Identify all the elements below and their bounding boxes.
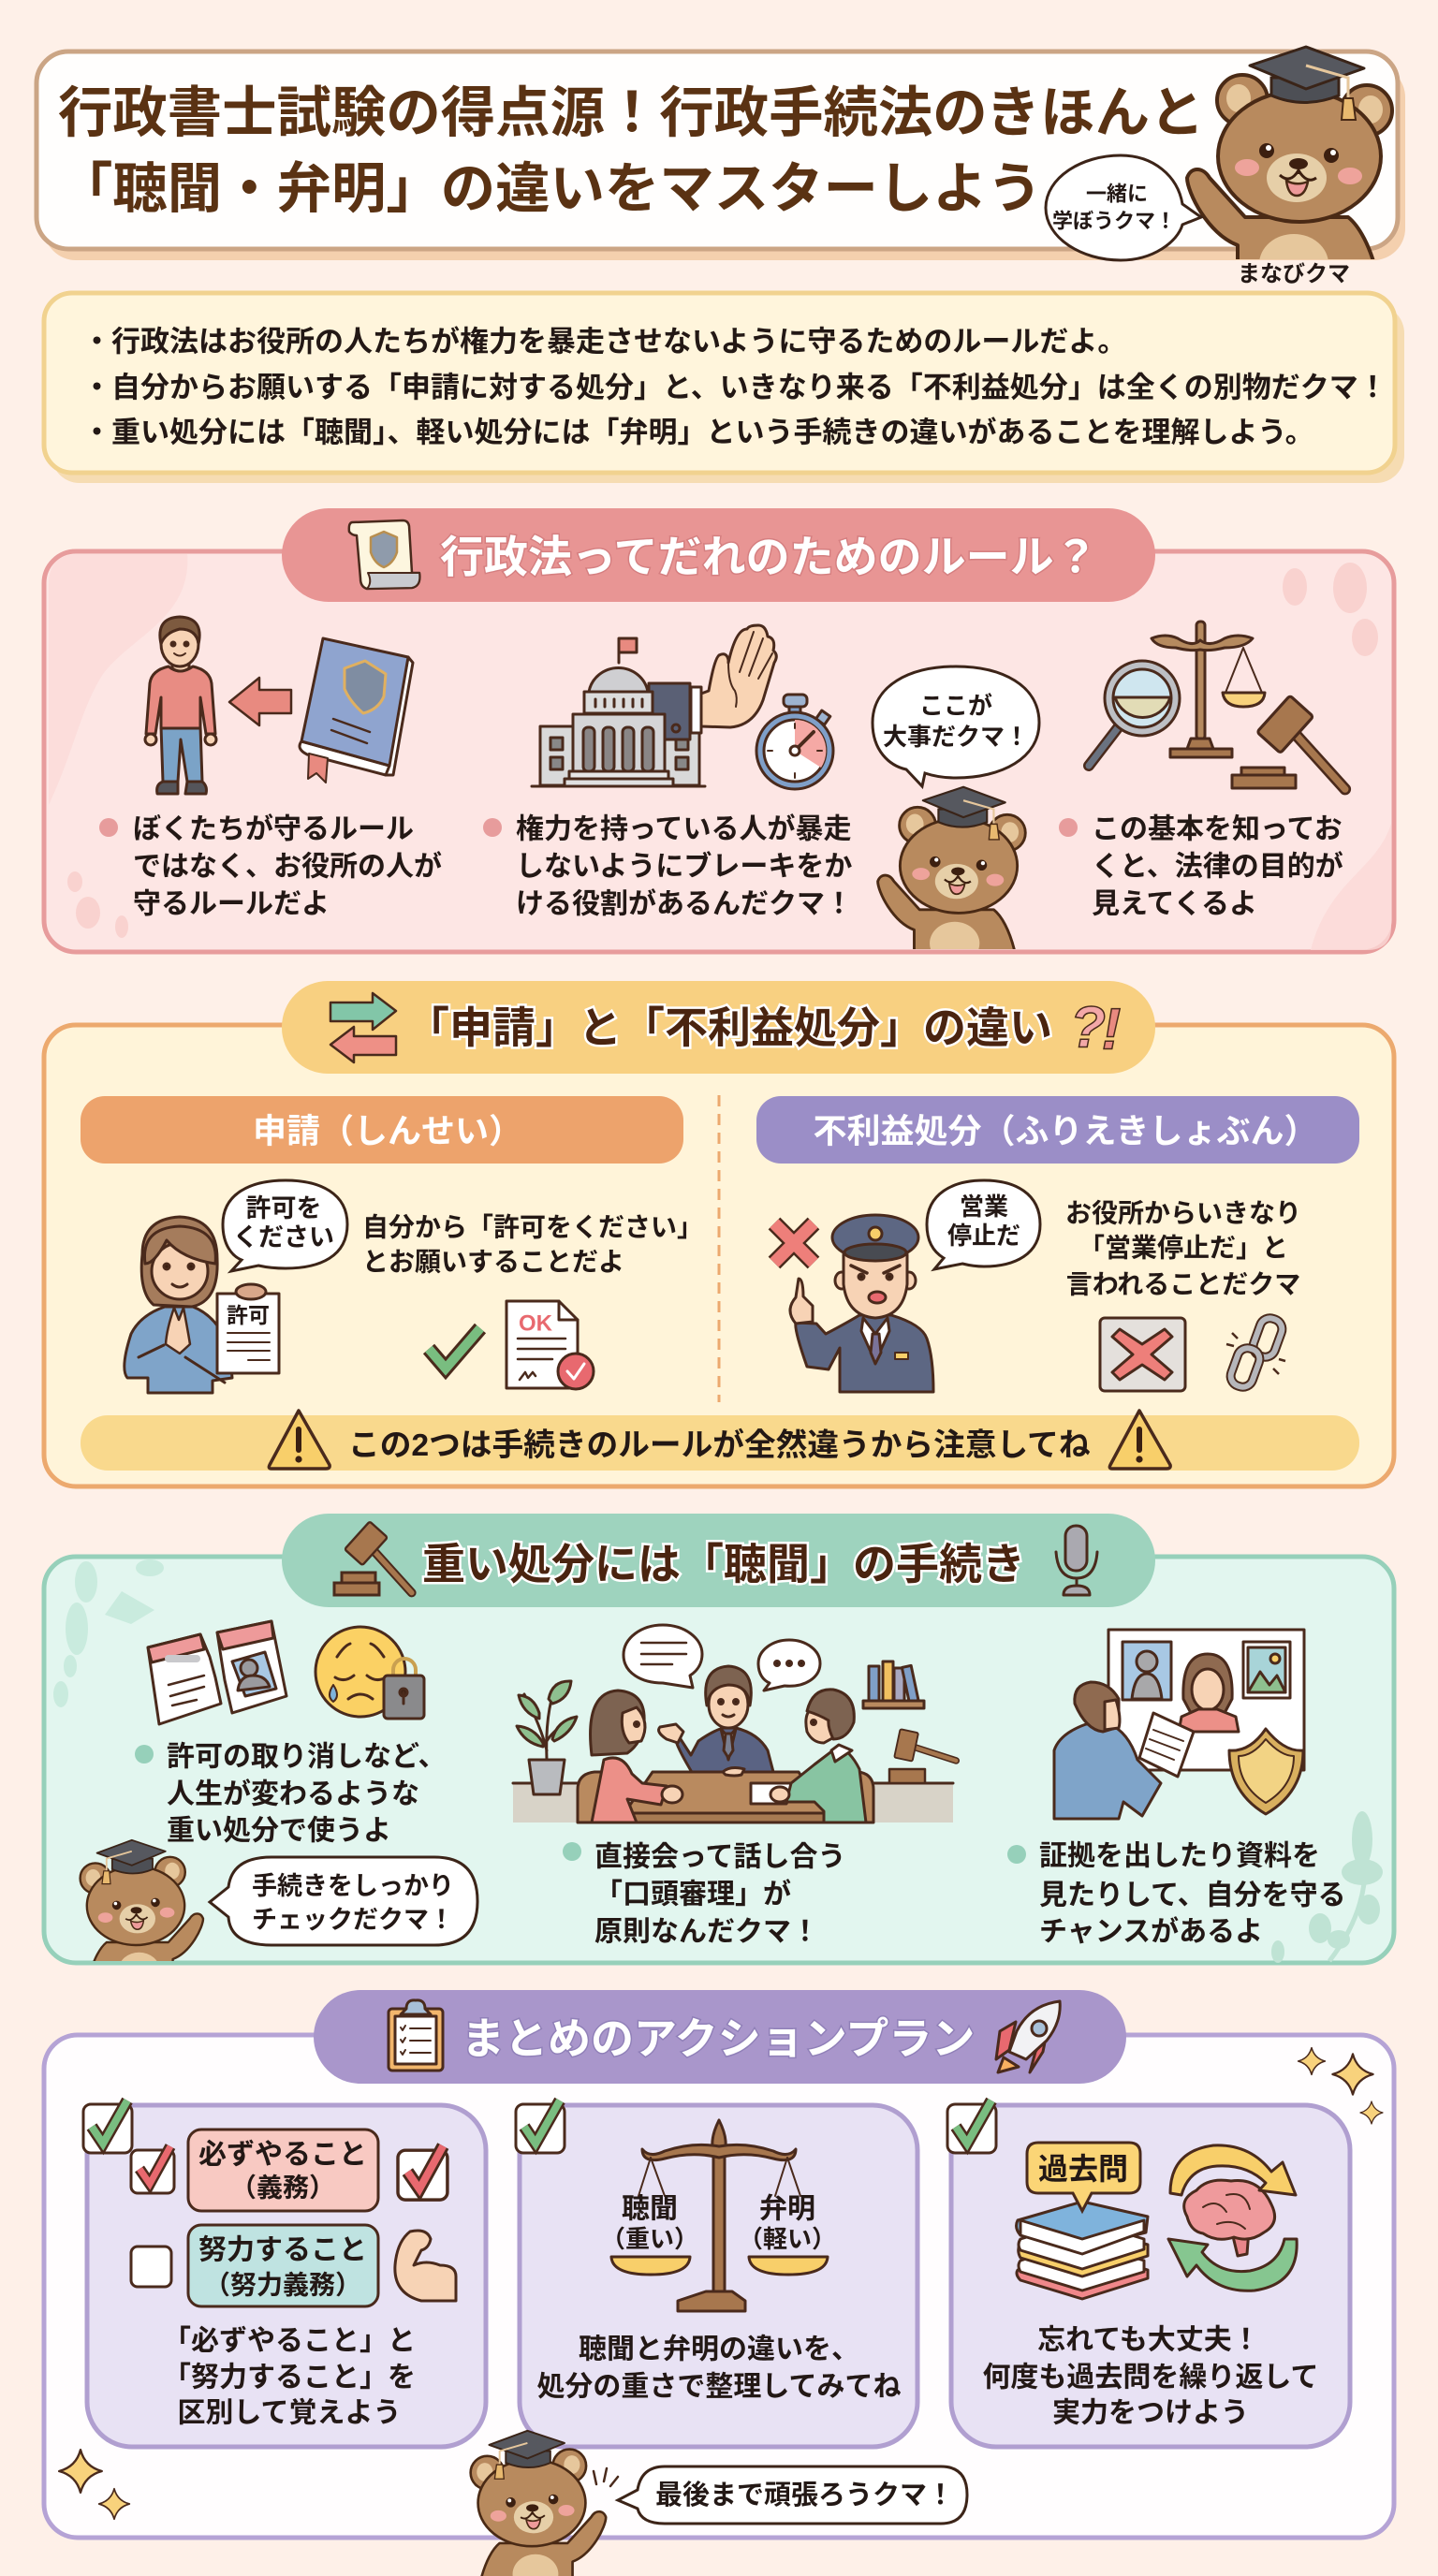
panel: summary points (44, 293, 1404, 483)
title text: 「聴聞・弁明」の違いをマスターしよう (58, 159, 1042, 219)
text: purpose of law: 見えてくるよ (1092, 889, 1257, 919)
text: oral hearing: 直接会って話し合う (594, 1842, 846, 1872)
card: duty vs effort (83, 2100, 486, 2447)
text: defend yourself: チャンスがあるよ (1039, 1915, 1263, 1947)
icon: rocket (996, 2001, 1060, 2072)
panel: action plan (44, 1990, 1394, 2576)
section heading: hearing (282, 1514, 1155, 1607)
icon: stopwatch (756, 695, 833, 789)
center man (676, 1728, 773, 1775)
text: adverse disposition explanation: 言われることだクマ (1066, 1269, 1300, 1299)
text: adverse disposition explanation (1065, 1198, 1301, 1299)
section heading: action plan (314, 1990, 1126, 2084)
warning bar: この2つは手続きのルールが全然違うから注意してね (348, 1427, 1091, 1463)
left header: application (81, 1096, 683, 1164)
text: heavy disposition (135, 1741, 446, 1846)
title text (58, 82, 1204, 219)
icon: government building with stop hand (532, 625, 776, 786)
label: past exams: 過去問 (1038, 2152, 1128, 2186)
text: defend yourself: 証拠を出したり資料を (1039, 1840, 1320, 1872)
text: oral hearing (563, 1842, 846, 1947)
speech bubble: important: ここが (919, 692, 992, 720)
label: explanation light: （軽い） (739, 2225, 836, 2253)
right header: adverse disposition: 不利益処分（ふりえきしょぶん） (814, 1112, 1317, 1149)
illustration: oral hearing meeting (513, 1625, 953, 1822)
label: must do (188, 2130, 378, 2211)
text: rule for officials: 守るルールだよ (133, 889, 330, 919)
icon: OK document (506, 1301, 594, 1389)
left woman (592, 1758, 667, 1822)
label: past exams (1027, 2143, 1140, 2211)
text: defend yourself (1007, 1840, 1346, 1947)
card: repeat past exams: 実力をつけよう (1052, 2398, 1249, 2428)
icon: microphone (1056, 1526, 1097, 1595)
left header: application: 申請（しんせい） (253, 1112, 522, 1149)
label: try to do: 努力すること (198, 2235, 367, 2265)
title banner (37, 51, 1405, 260)
books (869, 1666, 879, 1701)
card: duty vs effort: 区別して覚えよう (177, 2398, 402, 2428)
text: rule for officials: ぼくたちが守るルール (133, 812, 414, 844)
icon: question and exclamation: ? (1070, 996, 1106, 1060)
icon: scales, magnifier and gavel (1089, 622, 1296, 788)
section heading: action plan: まとめのアクションプラン (462, 2014, 975, 2063)
speech bubble: check procedure: 手続きをしっかり (252, 1872, 454, 1900)
text: purpose of law (1059, 814, 1343, 919)
text: application explanation: とお願いすることだよ (362, 1247, 624, 1277)
illustration: evidence review and shield (1054, 1630, 1304, 1819)
icon: question and exclamation (1070, 996, 1121, 1061)
text: rule for officials (99, 812, 442, 919)
panel: hearing procedure (44, 1514, 1394, 1988)
sparkles (59, 2048, 1383, 2519)
text: defend yourself: 見たりして、自分を守る (1039, 1880, 1346, 1911)
bubble 1 (624, 1625, 702, 1688)
speech bubble: please grant (223, 1180, 347, 1271)
illustration: woman with permit (125, 1217, 279, 1393)
speech bubble: keep going (618, 2466, 967, 2524)
speech bubble: important: 大事だクマ！ (883, 723, 1029, 751)
text: application explanation (362, 1213, 703, 1277)
icon: scroll with shield (349, 520, 419, 589)
speech bubble: together: 一緒に (1086, 182, 1148, 206)
text: oral hearing: 「口頭審理」が (594, 1878, 791, 1910)
section heading: difference (282, 981, 1155, 1074)
text: brake on power (483, 812, 853, 919)
icon: book stack (1017, 2202, 1148, 2299)
speech bubble: please grant: ください (233, 1223, 334, 1251)
panel: application vs adverse disposition (44, 981, 1394, 1486)
section heading: who is the rule for (282, 508, 1155, 602)
illustration: woman with permit: 許可 (227, 1303, 270, 1327)
speech bubble: suspend business: 停止だ (947, 1222, 1020, 1250)
right header: adverse disposition (756, 1096, 1359, 1164)
warning bar (81, 1411, 1359, 1471)
text: heavy disposition: 重い処分で使うよ (167, 1816, 391, 1846)
text: heavy disposition: 許可の取り消しなど、 (167, 1741, 446, 1773)
speech bubble: check procedure (210, 1857, 477, 1945)
plant (517, 1681, 577, 1794)
speech bubble: suspend business (927, 1180, 1040, 1269)
section heading: who is the rule for: 行政法ってだれのためのルール？ (440, 532, 1098, 582)
icon: clipboard (389, 2000, 443, 2071)
mascot: bear checks procedure (79, 1838, 204, 1961)
label: must do: （義務） (230, 2174, 335, 2202)
text: brake on power: ける役割があるんだクマ！ (516, 887, 853, 919)
card: repeat past exams (947, 2100, 1350, 2447)
icon: check mark (429, 1328, 480, 1368)
label: explanation light (739, 2194, 836, 2253)
icon: person (145, 617, 216, 794)
card: balance hearing and explanation: 処分の重さで整理してみてね (536, 2372, 902, 2402)
card: balance hearing and explanation: 聴聞と弁明の違いを、 (579, 2334, 859, 2364)
panel: summary points: ・重い処分には「聴聞」、軽い処分には「弁明」という手続きの違いがあることを理解しよう。 (82, 416, 1314, 449)
text: adverse disposition explanation: お役所からいきなり (1065, 1198, 1301, 1228)
mascot: bear explains importance (878, 787, 1025, 965)
arrow: rule points to person (229, 678, 291, 725)
text: oral hearing: 原則なんだクマ！ (594, 1917, 819, 1947)
icon: gavel heading (334, 1521, 412, 1595)
card: repeat past exams: 何度も過去問を繰り返して (982, 2363, 1319, 2393)
card: duty vs effort: 「努力すること」を (163, 2363, 416, 2393)
icon: balance scale (611, 2120, 828, 2311)
icon: law book with shield (300, 638, 413, 783)
text: purpose of law: くと、法律の目的が (1092, 850, 1343, 882)
icon: question and exclamation: ! (1102, 998, 1121, 1061)
icon: gavel (1257, 695, 1345, 789)
icon: cheer lines (594, 2468, 618, 2486)
label: hearing heavy: （重い） (601, 2225, 698, 2253)
arrows: repeat cycle (1168, 2145, 1297, 2291)
text: adverse disposition explanation: 「営業停止だ」と (1078, 1234, 1288, 1262)
speech bubble: please grant: 許可を (245, 1194, 322, 1222)
speech bubble: together: 学ぼうクマ！ (1052, 210, 1176, 232)
label: try to do: （努力義務） (204, 2271, 361, 2299)
panel: summary points: ・自分からお願いする「申請に対する処分」と、いきなり来る「不利益処分」は全くの別物だクマ！ (82, 371, 1387, 404)
mascot: bear cheering (471, 2431, 606, 2576)
text: rule for officials: ではなく、お役所の人が (133, 850, 442, 882)
title text: 行政書士試験の得点源！行政手続法のきほんと (58, 82, 1204, 144)
text: brake on power: しないようにブレーキをか (516, 850, 852, 882)
card: balance hearing and explanation (516, 2100, 917, 2447)
section heading: difference: 「申請」と「不利益処分」の違い (406, 1003, 1052, 1052)
mascot: manabi bear top (1187, 47, 1392, 294)
section heading: hearing: 重い処分には「聴聞」の手続き (422, 1540, 1025, 1588)
icon: red cross (774, 1223, 814, 1263)
icon: flexed arm (395, 2231, 456, 2301)
panel: who is admin law for (44, 508, 1394, 965)
label: hearing heavy: 聴聞 (622, 2194, 678, 2224)
label: hearing heavy (601, 2194, 698, 2253)
table (624, 1772, 826, 1813)
text: brake on power: 権力を持っている人が暴走 (516, 812, 852, 844)
text: application explanation: 自分から「許可をください」 (362, 1213, 703, 1241)
icon: small gavel (884, 1713, 956, 1787)
icon: broken chain (1226, 1315, 1285, 1390)
illustration: officer with raised finger (790, 1215, 933, 1392)
label: explanation light: 弁明 (759, 2194, 815, 2224)
icon: torn permit card (148, 1621, 286, 1724)
icon: cross box (1100, 1318, 1185, 1391)
speech bubble: important (873, 666, 1039, 786)
mascot: manabi bear top: まなびクマ (1238, 262, 1350, 286)
speech bubble: check procedure: チェックだクマ！ (252, 1906, 454, 1934)
speech bubble: suspend business: 営業 (960, 1193, 1008, 1221)
label: try to do (188, 2225, 378, 2306)
text: heavy disposition: 人生が変わるような (167, 1778, 419, 1810)
icon: OK document: OK (519, 1310, 553, 1337)
card: repeat past exams: 忘れても大丈夫！ (1037, 2325, 1260, 2355)
label: must do: 必ずやること (198, 2140, 367, 2170)
bubble 2 (758, 1640, 820, 1690)
card: duty vs effort: 「必ずやること」と (163, 2325, 416, 2357)
speech bubble: together (1046, 155, 1201, 260)
speech bubble: keep going: 最後まで頑張ろうクマ！ (655, 2480, 954, 2510)
icon: swap arrows (330, 993, 396, 1062)
panel: summary points: ・行政法はお役所の人たちが権力を暴走させないように守るためのルールだよ。 (82, 326, 1126, 358)
icon: brain (1184, 2180, 1275, 2256)
text: purpose of law: この基本を知ってお (1092, 814, 1343, 844)
icon: crying face with lock (315, 1627, 424, 1719)
right man (786, 1747, 866, 1822)
